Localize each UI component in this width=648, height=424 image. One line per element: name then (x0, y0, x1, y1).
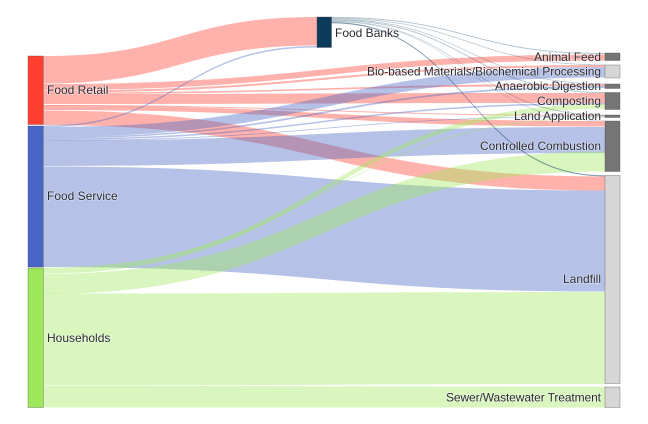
links: households (44, 104, 605, 408)
links: food retail (44, 17, 605, 190)
node: Bio-based Materials/Biochemical Processing (605, 65, 620, 78)
node: Land Application (605, 115, 620, 118)
label: Land Application: Land Application (514, 109, 601, 123)
links: food service (44, 46, 605, 292)
label: Landfill: Landfill (563, 272, 601, 286)
label: Sewer/Wastewater Treatment: Sewer/Wastewater Treatment (446, 390, 602, 404)
node: Animal Feed (605, 53, 620, 60)
label: Anaerobic Digestion: Anaerobic Digestion (495, 79, 601, 93)
node: Composting (605, 92, 620, 110)
node: Landfill (605, 176, 620, 384)
label: Composting: Composting (537, 94, 601, 108)
node: Controlled Combustion (605, 121, 620, 172)
node: Food Retail (28, 56, 44, 124)
links: food banks (331, 17, 605, 176)
label: Households: Households (47, 331, 110, 345)
label: Food Service: Food Service (47, 189, 118, 203)
label: Bio-based Materials/Biochemical Processing: Bio-based Materials/Biochemical Processing (367, 64, 601, 78)
node: Food Service (28, 126, 44, 267)
node: Sewer/Wastewater Treatment (605, 387, 620, 408)
label: Animal Feed: Animal Feed (534, 50, 601, 64)
label: Food Banks: Food Banks (335, 26, 399, 40)
label: Food Retail: Food Retail (47, 83, 108, 97)
node: Anaerobic Digestion (605, 84, 620, 88)
node: Households (28, 268, 44, 408)
label: Controlled Combustion: Controlled Combustion (480, 139, 601, 153)
node: Food Banks (317, 17, 332, 48)
